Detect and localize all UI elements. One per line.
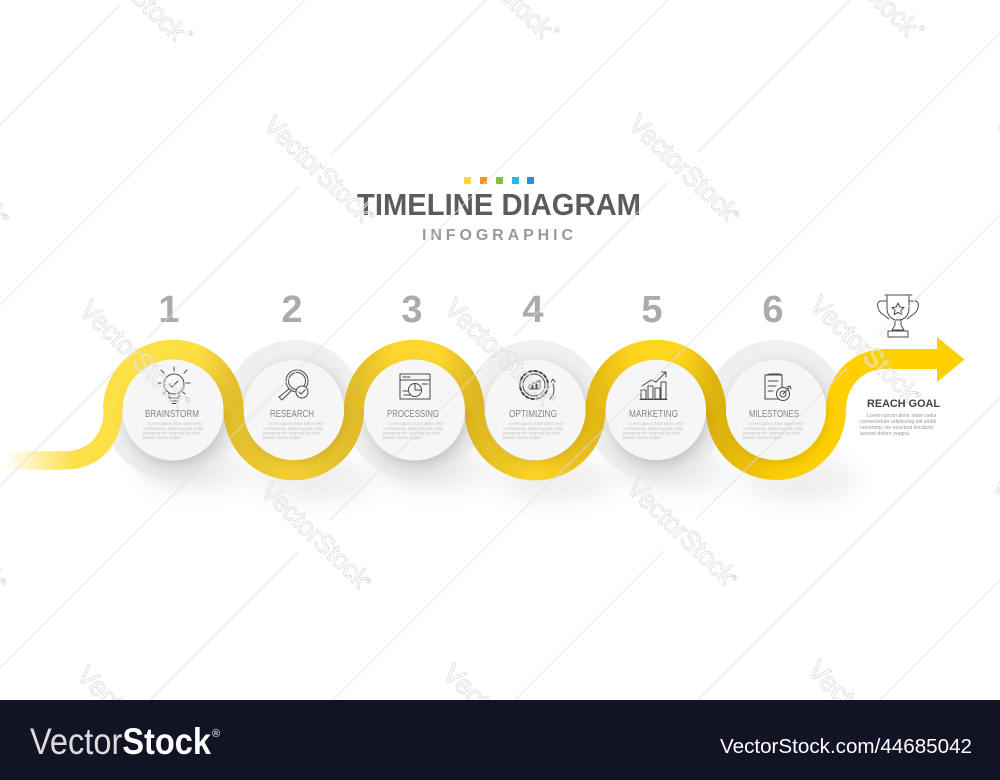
step 6	[726, 289, 826, 460]
description	[743, 421, 805, 440]
description: nonummy nie euismod tincidunt	[623, 430, 681, 436]
icon: checklist with target	[765, 374, 791, 400]
step 4	[486, 289, 586, 460]
icon: rising bar chart	[640, 372, 667, 400]
goal description: nonummy nie euismod tincidunt	[860, 425, 934, 431]
watermark text: Vect	[71, 660, 130, 718]
watermark text: VectorStock	[804, 290, 925, 408]
step 3	[364, 289, 465, 460]
watermark text: ®	[188, 29, 194, 38]
watermark text: ®	[550, 394, 556, 403]
watermark text: ®	[919, 24, 925, 33]
title block	[357, 177, 641, 244]
step 2	[244, 289, 344, 460]
white circle 1	[122, 360, 224, 460]
back discs	[103, 340, 846, 480]
description: consectetuer adipiscing elit seddi	[263, 426, 323, 431]
white circle 3	[364, 360, 465, 460]
step 5	[606, 289, 706, 460]
watermark text: ®	[554, 26, 560, 35]
description: Lorem ipsum dolor sitam setur	[749, 421, 805, 426]
yellow winding ribbon with arrow	[0, 337, 964, 470]
description: consectetuer adipiscing elit seddi	[623, 426, 683, 431]
icon: gear with bars	[520, 371, 555, 399]
description	[143, 421, 204, 440]
description: Lorem ipsum dolor sitam setur	[509, 421, 565, 426]
description: laoreet dolore magna	[263, 435, 302, 440]
description: nonummy nie euismod tincidunt	[383, 430, 441, 436]
description	[263, 421, 325, 440]
description: nonummy nie euismod tincidunt	[143, 430, 201, 436]
footer bar	[0, 700, 1000, 780]
registered mark: ®	[212, 728, 220, 740]
step 1	[122, 289, 224, 460]
goal description: consectetuer adipiscing elit seddi	[860, 419, 936, 425]
goal description	[860, 413, 937, 437]
watermark text: VectorStock	[74, 295, 195, 413]
goal description: Lorem ipsum dolor sitam setur	[867, 413, 937, 419]
watermark text: ®	[185, 396, 191, 405]
icon: magnifier	[279, 370, 308, 400]
watermark text: Vect	[802, 655, 861, 713]
label: BRAINSTORM	[145, 409, 199, 420]
soft ground shadows	[140, 450, 860, 500]
goal block	[860, 295, 940, 437]
description: nonummy nie euismod tincidunt	[503, 430, 561, 436]
description: laoreet dolore magna	[383, 435, 422, 440]
description	[383, 421, 445, 440]
title: TIMELINE DIAGRAM	[357, 187, 641, 222]
description: Lorem ipsum dolor sitam setur	[389, 421, 445, 426]
label: MARKETING	[629, 409, 678, 420]
colour dots	[464, 177, 534, 184]
watermark text: VectorStock	[623, 109, 744, 227]
number 6: 6	[762, 289, 784, 331]
description: consectetuer adipiscing elit seddi	[143, 426, 203, 431]
description	[503, 421, 565, 440]
white circle 4	[486, 360, 586, 460]
number 2: 2	[281, 289, 303, 331]
watermark text: ®	[1, 578, 7, 587]
description	[623, 421, 685, 440]
number 3: 3	[401, 289, 423, 331]
white circle 2	[244, 360, 344, 460]
description: consectetuer adipiscing elit seddi	[503, 426, 563, 431]
footer url: VectorStock.com/44685042	[720, 735, 972, 758]
description: laoreet dolore magna	[743, 435, 782, 440]
label: MILESTONES	[749, 409, 799, 420]
goal description: laoreet dolore magna	[860, 431, 909, 437]
description: laoreet dolore magna	[503, 435, 542, 440]
watermark text: VectorStock	[255, 476, 376, 594]
label: OPTIMIZING	[509, 409, 557, 420]
description: consectetuer adipiscing elit seddi	[743, 426, 803, 431]
icon: trophy	[878, 295, 918, 337]
watermark text: ®	[732, 574, 738, 583]
watermark text: ®	[3, 213, 9, 222]
goal label: REACH GOAL	[867, 398, 940, 410]
subtitle: INFOGRAPHIC	[422, 227, 573, 244]
watermark text: VectorStock	[621, 473, 742, 591]
description: nonummy nie euismod tincidunt	[263, 430, 321, 436]
watermark text: Vect	[437, 658, 496, 716]
number 4: 4	[522, 289, 544, 331]
footer logo: VectorStock	[30, 721, 211, 762]
white circle 5	[606, 360, 706, 460]
watermark text: ®	[915, 391, 921, 400]
description: laoreet dolore magna	[143, 435, 182, 440]
description: nonummy nie euismod tincidunt	[743, 430, 801, 436]
description: Lorem ipsum dolor sitam setur	[148, 421, 204, 426]
number 1: 1	[158, 289, 180, 331]
number 5: 5	[641, 289, 663, 331]
watermark text: VectorStock	[258, 110, 379, 228]
description: Lorem ipsum dolor sitam setur	[629, 421, 685, 426]
description: Lorem ipsum dolor sitam setur	[269, 421, 325, 426]
circle shadows on discs	[131, 368, 824, 470]
description: consectetuer adipiscing elit seddi	[383, 426, 443, 431]
icon: light bulb	[158, 367, 190, 404]
icon: browser with chart	[400, 374, 430, 399]
watermark text: ®	[369, 211, 375, 220]
white circle 6	[726, 360, 826, 460]
label: PROCESSING	[387, 409, 439, 420]
watermark text: ®	[734, 210, 740, 219]
label: RESEARCH	[270, 409, 314, 420]
watermark text: ®	[366, 577, 372, 586]
watermark text: VectorStock	[439, 293, 560, 411]
description: laoreet dolore magna	[623, 435, 662, 440]
